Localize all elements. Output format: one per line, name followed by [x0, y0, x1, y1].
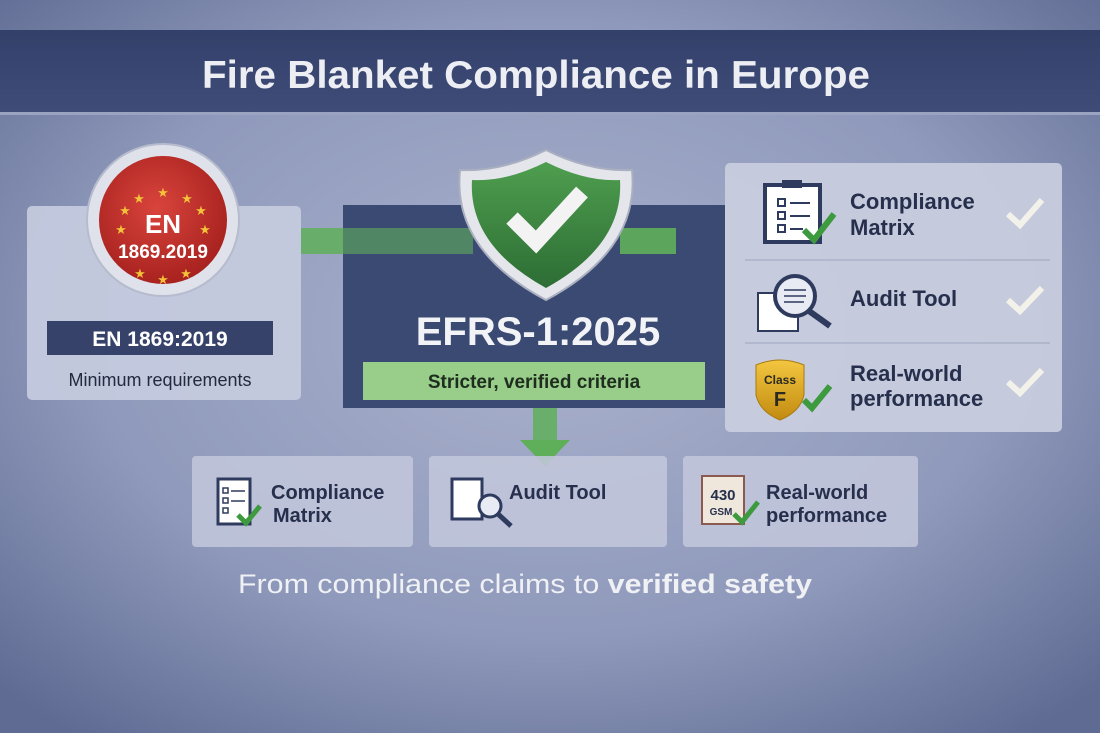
- row: compliance matrix: Matrix: [850, 215, 916, 240]
- row: real-world performance: Real-world: [850, 361, 962, 386]
- icon: EN badge: ★: [157, 185, 169, 200]
- label: EN 1869:2019: EN 1869:2019: [92, 328, 228, 351]
- icon: EN badge: ★: [133, 191, 145, 206]
- panel: bottom compliance matrix: Matrix: [273, 505, 332, 527]
- label: stricter criteria: Stricter, verified criteria: [428, 372, 641, 393]
- label: EN 1869:2019: [47, 321, 273, 355]
- icon: EN badge: ★: [157, 272, 169, 287]
- panel: bottom real-world: GSM: [710, 507, 732, 518]
- panel: bottom real-world: performance: [766, 505, 887, 527]
- icon: EN badge: ★: [180, 266, 192, 281]
- row: compliance matrix: [765, 180, 1042, 242]
- icon: EN badge: 1869.2019: [118, 242, 208, 263]
- icon: EN badge: ★: [199, 222, 211, 237]
- panel: bottom real-world: Real-world: [766, 482, 868, 504]
- heading: EFRS-1:2025: EFRS-1:2025: [416, 310, 660, 354]
- title bar: [0, 30, 1100, 115]
- icon: EN badge: EN: [145, 209, 181, 239]
- label: stricter criteria: [363, 362, 705, 400]
- icon: EN badge: [87, 144, 239, 296]
- icon: EN badge: ★: [195, 203, 207, 218]
- row: compliance matrix: Compliance: [850, 189, 975, 214]
- panel: EN 1869: [27, 144, 301, 400]
- panel: bottom real-world: [683, 456, 918, 547]
- row: audit tool: Audit Tool: [850, 286, 957, 311]
- panel: bottom audit tool: Audit Tool: [509, 482, 606, 504]
- arrow: down: [520, 408, 570, 466]
- icon: EN badge: ★: [181, 191, 193, 206]
- row: real-world performance: [756, 360, 1042, 420]
- tagline: From compliance claims to verified safety: [238, 569, 812, 599]
- row: real-world performance: performance: [850, 386, 983, 411]
- text: minimum requirements: Minimum requirements: [68, 370, 252, 390]
- arrow: horizontal green: [301, 215, 716, 264]
- row: real-world performance: F: [774, 389, 786, 411]
- title: Fire Blanket Compliance in Europe: [202, 54, 870, 97]
- icon: EN badge: ★: [115, 222, 127, 237]
- panel: bottom compliance matrix: [192, 456, 413, 547]
- icon: shield: [459, 150, 633, 300]
- icon: EN badge: ★: [119, 203, 131, 218]
- panel: right checklist: [725, 163, 1062, 432]
- row: real-world performance: Class: [764, 373, 796, 387]
- icon: EN badge: ★: [134, 266, 146, 281]
- panel: bottom real-world: 430: [710, 487, 736, 504]
- panel: bottom audit tool: [429, 456, 667, 547]
- row: audit tool: [758, 276, 1042, 331]
- panel: bottom compliance matrix: Compliance: [271, 482, 384, 504]
- panel: EFRS: [343, 150, 725, 408]
